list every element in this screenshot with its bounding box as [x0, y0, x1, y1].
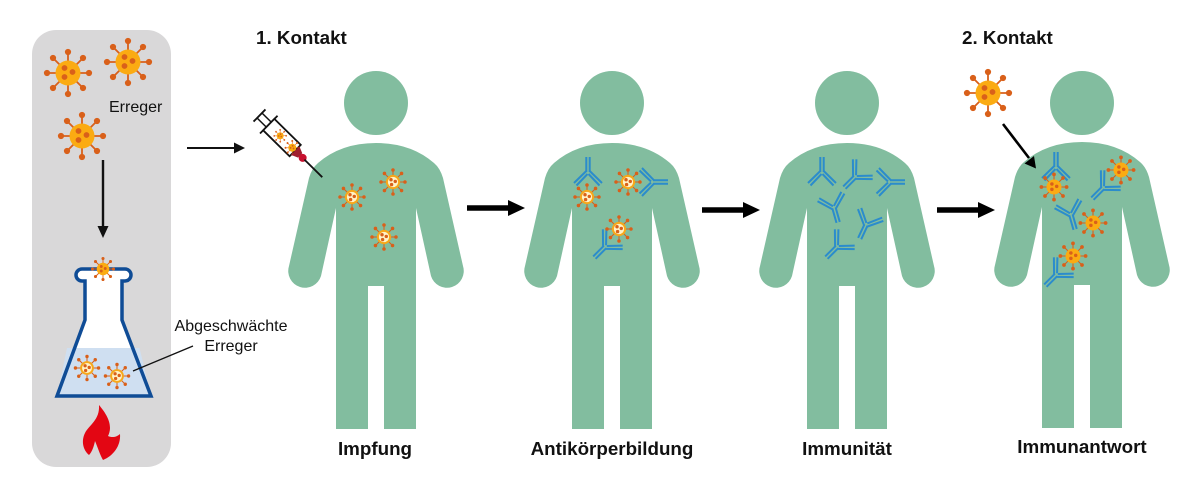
- arrow: antibody formation to immunity: [702, 202, 760, 218]
- arrow: vaccination to antibody formation: [467, 200, 525, 216]
- label: Erreger: Erreger: [109, 99, 163, 116]
- arrow: immunity to immune response: [937, 202, 995, 218]
- arrow: pathogen into body: [1003, 124, 1036, 168]
- icon: flame: [83, 405, 120, 460]
- label: Antikörperbildung: Antikörperbildung: [531, 438, 693, 459]
- icon: pathogen 1: [45, 50, 91, 96]
- person: vaccination: [288, 71, 464, 429]
- heading: second contact: 2. Kontakt: [962, 27, 1054, 48]
- arrow: pathogen to flask: [98, 160, 108, 238]
- callout: weakened pathogens: Abgeschwächte: [175, 318, 288, 335]
- label: Immunantwort: Immunantwort: [1017, 436, 1147, 457]
- label: Impfung: Impfung: [338, 438, 412, 459]
- person: antibody formation: [524, 71, 700, 429]
- icon: pathogen 2: [105, 39, 151, 85]
- icon: syringe: [251, 107, 331, 186]
- callout: weakened pathogens: Erreger: [204, 338, 258, 355]
- person: immunity: [759, 71, 935, 429]
- panel: attenuated pathogen production: [32, 30, 171, 467]
- icon: incoming pathogen: [965, 70, 1011, 116]
- icon: flask: [57, 257, 151, 396]
- callout: weakened pathogens: [133, 318, 288, 371]
- person: immune response: [994, 71, 1170, 428]
- label: Immunität: Immunität: [802, 438, 893, 459]
- heading: first contact: 1. Kontakt: [256, 27, 348, 48]
- icon: pathogen 3: [59, 113, 105, 159]
- arrow: to first contact: [187, 142, 245, 154]
